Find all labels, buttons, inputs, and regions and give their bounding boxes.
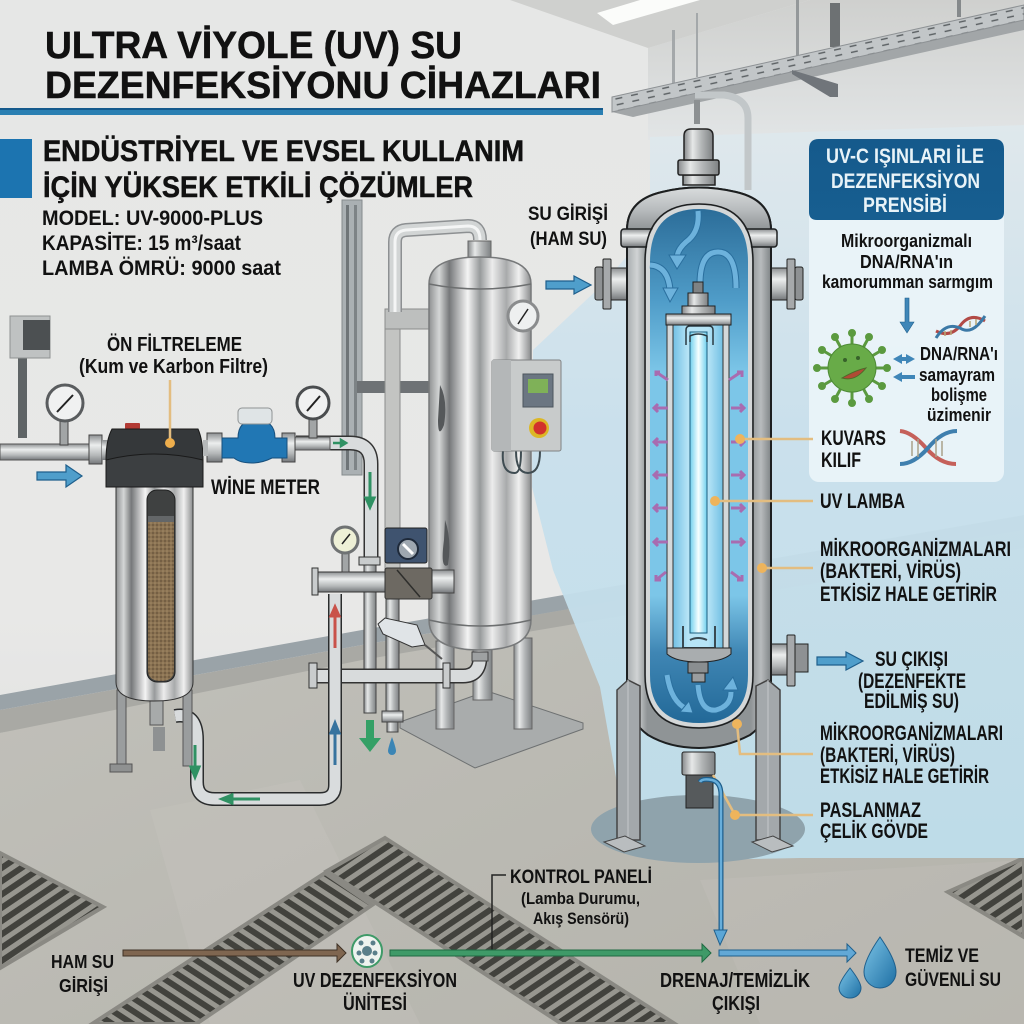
flow: UV unit arrow [390, 944, 711, 962]
wall junction box [10, 316, 50, 438]
panel DNA text: üzimenir [927, 405, 991, 425]
title rule [0, 108, 603, 115]
lamp bottom fixture [667, 648, 731, 682]
subtitle block [0, 135, 524, 204]
flow: clean water label: TEMİZ VE [905, 946, 979, 967]
panel DNA text: DNA/RNA'ı [920, 344, 998, 364]
specifications: MODEL: UV-9000-PLUS [42, 207, 263, 230]
top nozzle [678, 129, 719, 185]
arrow: inlet to vessel [546, 276, 591, 294]
label: water outlet: EDİLMİŞ SU) [864, 690, 959, 713]
flow: raw water input [51, 944, 346, 996]
vessel shell [627, 188, 771, 748]
vessel dome [627, 188, 771, 230]
panel DNA text [919, 344, 998, 425]
label: stainless body [820, 799, 928, 843]
label: water outlet: SU ÇIKIŞI [875, 648, 948, 671]
label: control panel [492, 867, 652, 955]
arrows: toward virus [893, 354, 915, 382]
wall rail [342, 200, 429, 475]
panel intro text: Mikroorganizmalı [841, 231, 972, 251]
support legs [604, 680, 793, 852]
label: pre-filtration: (Kum ve Karbon Filtre) [79, 356, 268, 378]
subtitle block: İÇİN YÜKSEK ETKİLİ ÇÖZÜMLER [43, 171, 473, 204]
flow: drain label: DRENAJ/TEMİZLİK [660, 969, 810, 992]
flow: drain arrow [719, 944, 856, 962]
UV vessel cutaway [595, 129, 808, 852]
vessel flange [621, 229, 777, 247]
label: pre-filtration [79, 333, 268, 448]
panel intro text [822, 231, 993, 292]
side ports [595, 259, 808, 686]
panel intro text: kamorumman sarmgım [822, 272, 993, 292]
label: water inlet: (HAM SU) [530, 229, 607, 250]
label: microorganisms 1: (BAKTERİ, VİRÜS) [820, 560, 961, 583]
label: quartz sleeve: KUVARS [821, 427, 886, 450]
flow: drain label [660, 969, 810, 1015]
icon: small DNA [936, 316, 985, 338]
icon: virus [814, 330, 890, 406]
panel: UV-C principle [809, 139, 1004, 482]
flow: drain label: ÇIKIŞI [712, 993, 760, 1015]
callout dots [710, 434, 767, 820]
control box [492, 360, 561, 473]
label: water inlet [528, 204, 608, 250]
specifications [42, 207, 281, 280]
flow: clean water label: GÜVENLİ SU [905, 970, 1001, 991]
label: microorganisms 2: (BAKTERİ, VİRÜS) [820, 744, 955, 767]
UV lamp [683, 326, 715, 648]
icon: water drops [839, 937, 896, 998]
blue drain pipe arrow [700, 779, 727, 945]
flow: clean water label [905, 946, 1001, 991]
subtitle block: ENDÜSTRİYEL VE EVSEL KULLANIM [43, 135, 524, 168]
panel header: UV-C IŞINLARI İLE [826, 145, 984, 168]
label: microorganisms 2 [820, 722, 1003, 788]
sensor [378, 618, 442, 659]
pressure tank unit [385, 226, 583, 768]
filter head [106, 423, 203, 487]
flow: raw water input: HAM SU [51, 952, 114, 972]
blue principle backdrop [532, 125, 1024, 860]
title: DEZENFEKSİYONU CİHAZLARI [45, 65, 601, 107]
label: quartz sleeve [821, 427, 886, 472]
background: floor [0, 515, 1024, 1024]
label: water outlet [858, 648, 966, 713]
label: control panel: KONTROL PANELİ [510, 867, 652, 888]
panel header: PRENSİBİ [863, 194, 947, 217]
ground shadow under vessel [591, 795, 805, 863]
panel header [809, 139, 1004, 220]
inner flow arrows [650, 211, 736, 710]
label: stainless body: ÇELİK GÖVDE [820, 820, 928, 843]
water cavity [648, 207, 750, 725]
specifications: LAMBA ÖMRÜ: 9000 saat [42, 257, 281, 280]
valve and manifold piping [309, 527, 488, 732]
label: microorganisms 1 [820, 538, 1011, 606]
arrow: water outlet [817, 652, 863, 670]
arrow: raw water in [37, 465, 82, 487]
flow: UV unit label: UV DEZENFEKSİYON [293, 969, 457, 992]
label: stainless body: PASLANMAZ [820, 799, 921, 822]
label: control panel: (Lamba Durumu, [521, 889, 640, 908]
pipe flow arrows [191, 440, 396, 803]
flow: raw water input: GİRİŞİ [59, 976, 108, 996]
pre-filter pipework [0, 435, 380, 799]
title: ULTRA VİYOLE (UV) SU [45, 25, 462, 67]
title [45, 25, 601, 107]
flow: UV unit label: ÜNİTESİ [343, 992, 407, 1015]
label: control panel: Akış Sensörü) [533, 909, 629, 928]
water meter [203, 408, 295, 463]
tank gauge [508, 301, 538, 331]
callout lines [713, 439, 813, 815]
gauge: manifold [332, 527, 358, 572]
label: pre-filtration: ÖN FİLTRELEME [107, 333, 242, 356]
label: UV lamp: UV LAMBA [820, 490, 905, 513]
gauge: inlet [47, 385, 83, 445]
UV ray arrows [654, 372, 744, 580]
panel header: DEZENFEKSİYON [831, 170, 980, 193]
background: far wall and ceiling [510, 0, 1024, 140]
label: water meter: WİNE METER [211, 476, 320, 499]
pre-filter [47, 385, 329, 772]
panel DNA text: bolişme [931, 385, 987, 405]
gauge: outlet [297, 387, 329, 438]
panel intro text: DNA/RNA'ın [860, 252, 953, 272]
arrow: down [900, 298, 914, 333]
quartz sleeve [667, 325, 729, 648]
cable tray [612, 5, 1024, 190]
floor gratings [0, 838, 1024, 1024]
lamp top fixture [666, 282, 731, 325]
specifications: KAPASİTE: 15 m³/saat [42, 232, 241, 255]
panel DNA text: samayram [919, 365, 995, 385]
bottom outlet fitting [682, 752, 715, 808]
label: water inlet: SU GİRİŞİ [528, 204, 608, 225]
label: water outlet: (DEZENFEKTE [858, 670, 966, 693]
icon: large DNA [900, 431, 957, 464]
flow: UV unit icon [352, 935, 382, 967]
valve actuator [385, 528, 427, 563]
flow: UV unit label [293, 969, 457, 1015]
label: quartz sleeve: KILIF [821, 449, 861, 472]
